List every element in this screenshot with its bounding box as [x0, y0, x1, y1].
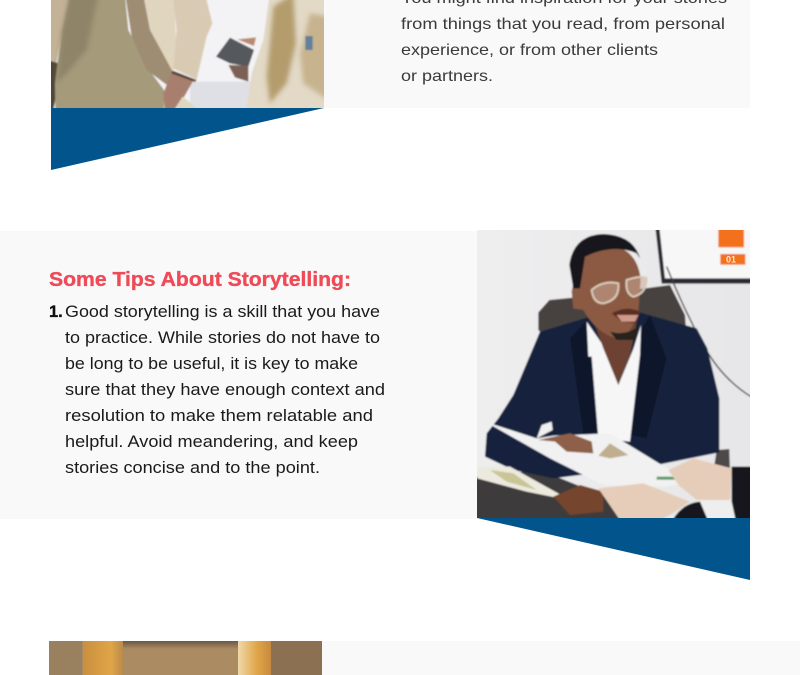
text block: inspiration: from things that you read, from personal: [401, 16, 725, 33]
shape: blue triangle under middle photo: [477, 518, 750, 580]
text block: inspiration: [401, 0, 727, 85]
text block: tip 1: stories concise and to the point.: [65, 459, 320, 477]
icon: navy suit: [485, 312, 719, 478]
icon: white shirt: [587, 322, 641, 442]
icon: hands: [538, 433, 593, 453]
icon: beige jacket edge: [51, 0, 70, 64]
icon: neck and face: [595, 322, 637, 385]
text block: tip 1: sure that they have enough context and: [65, 381, 385, 399]
heading: Some Tips About Storytelling: Some Tips About Storytelling:: [49, 269, 351, 291]
photo: businessman reviewing documents: [477, 230, 750, 518]
photo: wooden wall with lights: [49, 641, 322, 675]
icon: glasses: [592, 277, 647, 303]
text: whiteboard label 01: 01: [726, 254, 736, 264]
panel: storytelling tips background: [0, 231, 477, 519]
text block: tip 1: 1.: [49, 303, 63, 321]
text block: tip 1: [49, 303, 385, 477]
panel: bottom section background: [322, 641, 800, 675]
text block: inspiration: experience, or from other clients: [401, 42, 658, 59]
icon: office chair: [537, 284, 686, 333]
text block: tip 1: resolution to make them relatable and: [65, 407, 373, 425]
icon: phone: [216, 38, 254, 67]
icon: documents: [492, 424, 674, 481]
photo: two people with phone: [51, 0, 324, 108]
icon: hand: [162, 73, 194, 108]
text block: tip 1: to practice. While stories do not have to: [65, 329, 380, 347]
icon: dark sleeve: [730, 466, 750, 518]
text block: tip 1: Good storytelling is a skill that you have: [65, 303, 380, 321]
text block: tip 1: helpful. Avoid meandering, and keep: [65, 433, 358, 451]
icon: whiteboard frame: [660, 230, 750, 279]
icon: beige cardigan and sleeve: [142, 0, 177, 73]
text block: inspiration: or partners.: [401, 68, 493, 85]
text block: tip 1: be long to be useful, it is key to make: [65, 355, 358, 373]
shape: blue triangle under top photo: [51, 108, 324, 170]
icon: olive shirt: [55, 0, 164, 113]
icon: dark table: [477, 470, 620, 518]
panel: inspiration text background: [324, 0, 750, 108]
icon: patterned jacket: [246, 0, 324, 108]
